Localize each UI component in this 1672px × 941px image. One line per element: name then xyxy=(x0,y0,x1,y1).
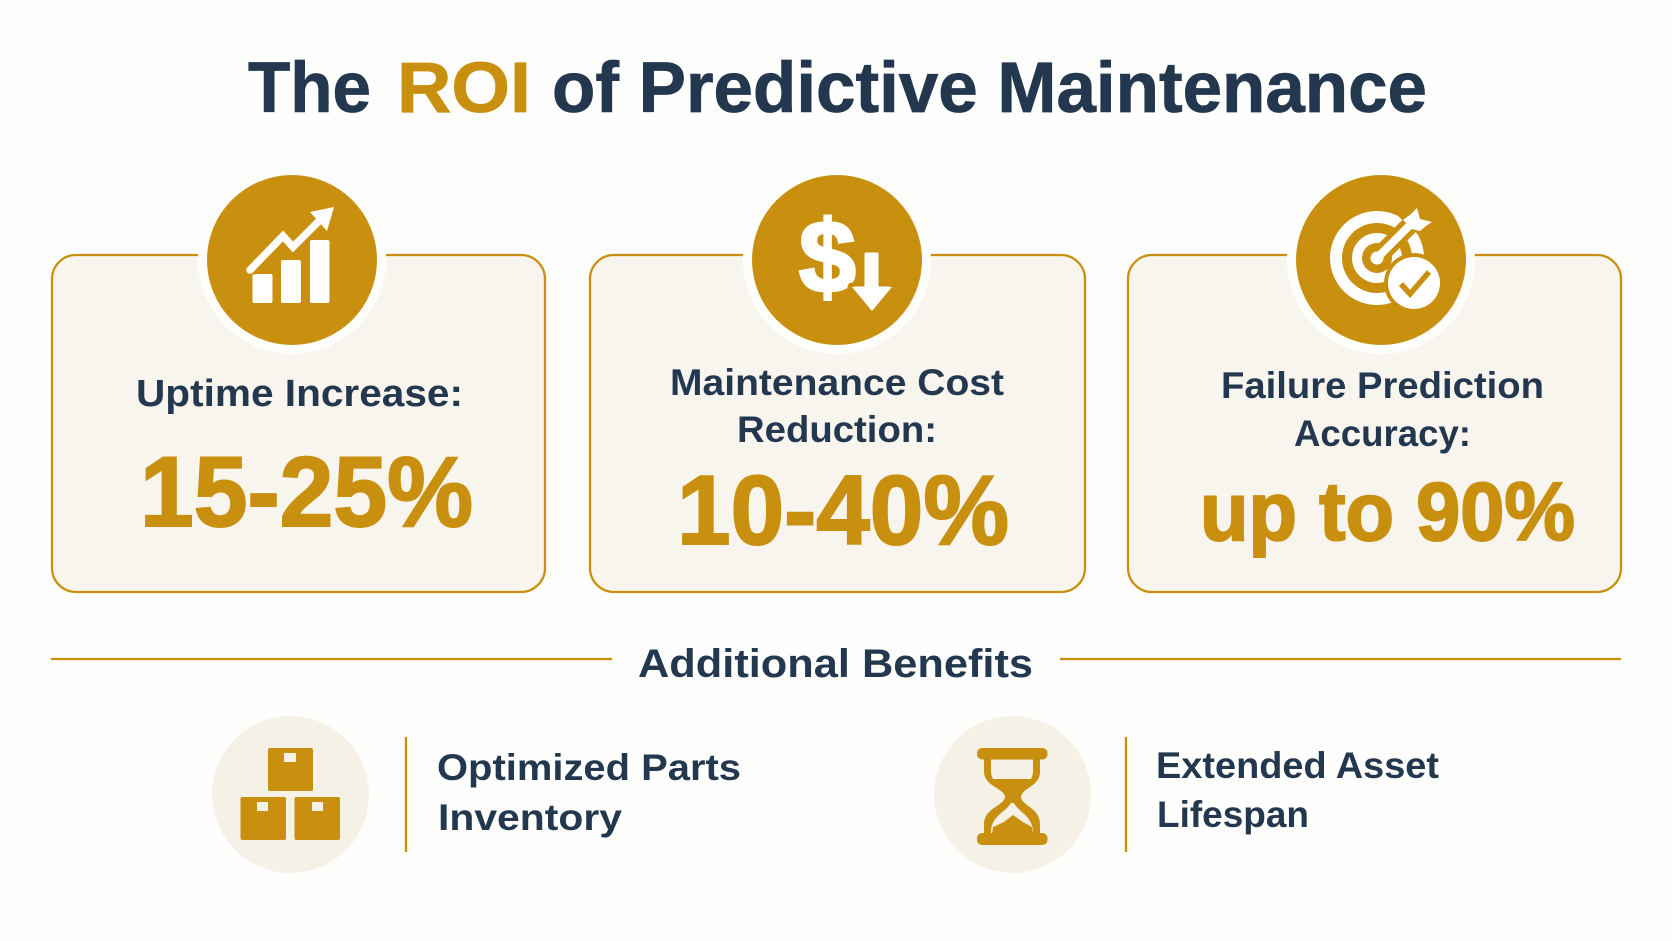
icon: target with arrow and check xyxy=(1287,166,1475,354)
panel: maintenance cost reduction xyxy=(590,166,1085,592)
label: maintenance cost reduction xyxy=(670,362,1004,450)
title: The xyxy=(248,49,371,128)
text: optimized parts inventory: Inventory xyxy=(438,797,622,838)
section heading: additional benefits: Additional Benefits xyxy=(638,642,1033,686)
text: extended asset lifespan: Lifespan xyxy=(1157,794,1309,835)
icon: dollar with down arrow xyxy=(743,166,931,354)
icon: stacked boxes xyxy=(212,716,369,873)
label: failure prediction accuracy: Accuracy: xyxy=(1294,413,1471,454)
label: failure prediction accuracy: Failure Prediction xyxy=(1221,365,1544,406)
text: optimized parts inventory xyxy=(437,747,741,838)
text: extended asset lifespan: Extended Asset xyxy=(1156,745,1439,786)
title: ROI xyxy=(397,49,531,128)
panel: uptime increase xyxy=(52,166,545,592)
value: 15-25%: 15-25% xyxy=(140,436,473,547)
benefit: extended asset lifespan xyxy=(934,716,1439,873)
text: optimized parts inventory: Optimized Parts xyxy=(437,747,741,788)
title: of Predictive Maintenance xyxy=(552,49,1427,128)
value: 10-40%: 10-40% xyxy=(677,455,1009,565)
text: extended asset lifespan xyxy=(1156,745,1439,835)
label: failure prediction accuracy xyxy=(1221,365,1544,454)
label: maintenance cost reduction: Maintenance Cost xyxy=(670,362,1004,403)
panel: failure prediction accuracy xyxy=(1128,166,1621,592)
label: uptime increase: Uptime Increase: xyxy=(136,373,463,415)
value: up to 90%: up to 90% xyxy=(1200,465,1575,558)
label: maintenance cost reduction: Reduction: xyxy=(737,409,937,450)
icon: hourglass xyxy=(934,716,1091,873)
icon: rising bar chart xyxy=(198,166,386,354)
icon: dollar with down arrow: $ xyxy=(799,200,856,314)
benefit: optimized parts inventory xyxy=(212,716,741,873)
